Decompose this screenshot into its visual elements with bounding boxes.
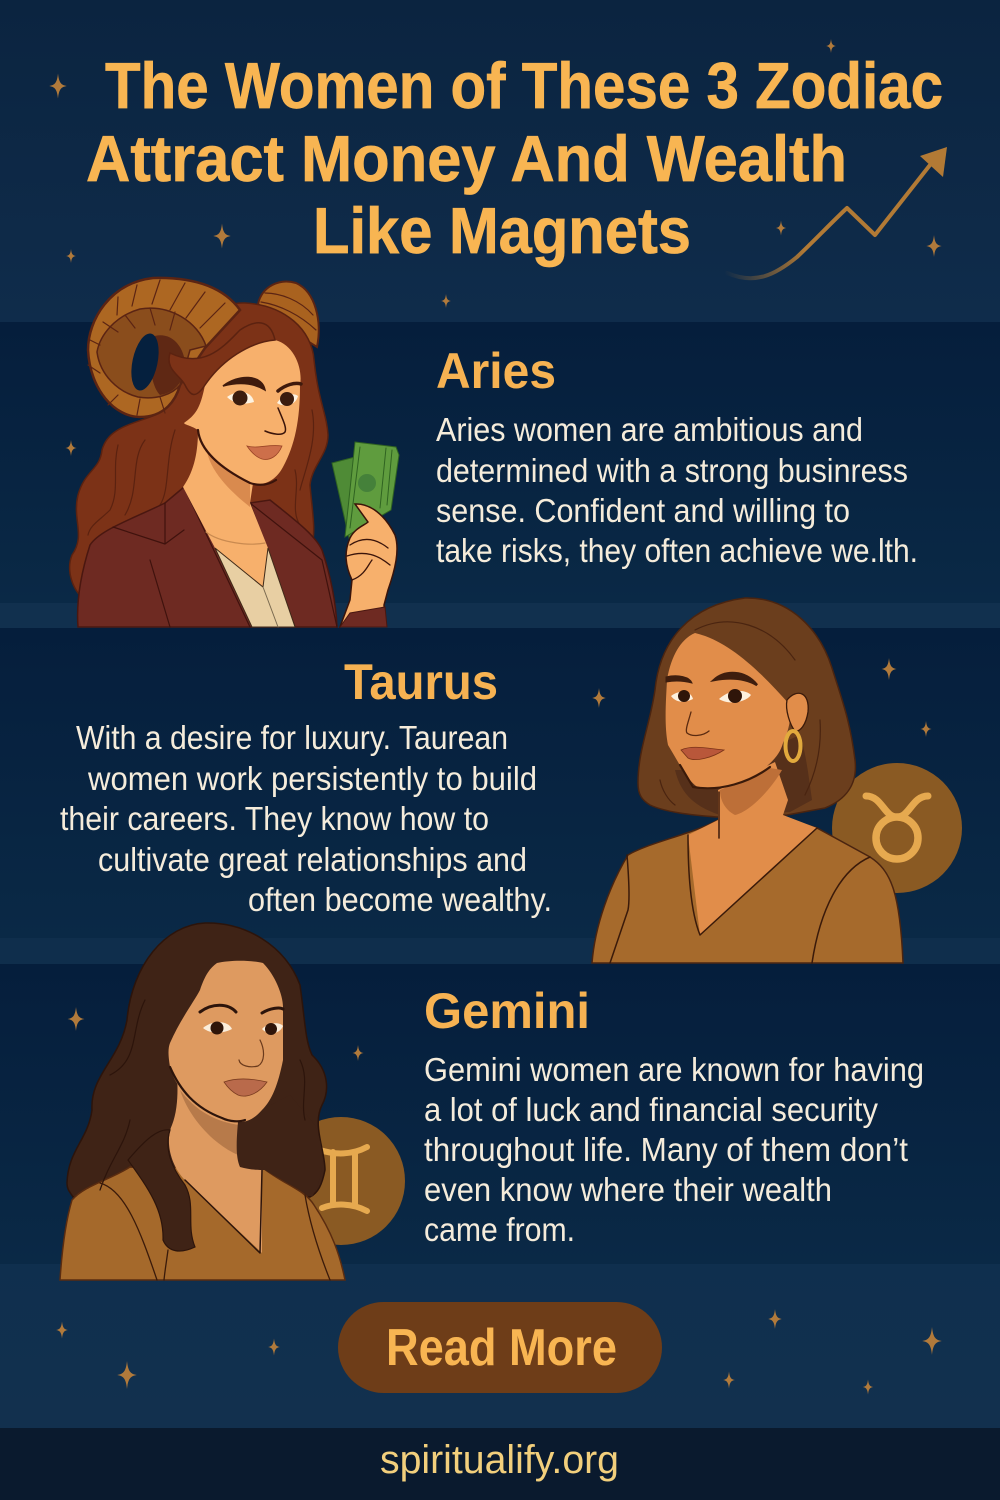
- hand and cuff: [340, 504, 397, 627]
- right horn: [258, 282, 319, 347]
- illustration: Aries woman with ram horns and money: [70, 278, 399, 627]
- panel: Gemini text: throughout life. Many of them don’t: [424, 1131, 908, 1168]
- panel: Gemini text: Gemini: [424, 983, 590, 1039]
- face: [168, 961, 283, 1122]
- panel: Taurus text: cultivate great relationships and: [98, 841, 527, 878]
- button: Read More: [338, 1302, 662, 1393]
- neck and chest: [688, 762, 817, 935]
- footer: website: [0, 1428, 1000, 1500]
- panel: Taurus text: women work persistently to build: [87, 760, 537, 797]
- eyes: [227, 392, 254, 404]
- footer: website: spiritualify.org: [380, 1438, 619, 1482]
- hair: [70, 303, 328, 600]
- eyebrows: [200, 1005, 283, 1013]
- panel: Aries text: take risks, they often achieve we.lth.: [436, 532, 918, 569]
- face: [666, 633, 790, 788]
- lips: [681, 747, 724, 760]
- panel: Gemini text: came from.: [424, 1211, 575, 1248]
- money bills: [332, 457, 360, 538]
- eyes: [671, 692, 693, 702]
- ear: [787, 693, 808, 731]
- title: Like Magnets: [313, 194, 691, 267]
- panel: Aries text: Aries women are ambitious and: [436, 411, 863, 448]
- panel: Taurus text: often become wealthy.: [248, 881, 552, 918]
- panel: Aries text: determined with a strong businress: [436, 452, 908, 489]
- hair: [638, 598, 855, 817]
- nose: [265, 408, 286, 434]
- eyebrows: [223, 377, 265, 390]
- horn opening: [127, 331, 163, 393]
- arrow: rising wealth trend: [727, 147, 947, 278]
- neck and chest skin: [183, 430, 268, 587]
- front hair sweep: [169, 323, 275, 394]
- Taurus badge: [832, 763, 962, 893]
- panel: Aries text: sense. Confident and willing to: [436, 492, 850, 529]
- panel: Taurus text: With a desire for luxury. Taurean: [76, 719, 508, 756]
- illustration: Taurus woman with zodiac badge: [592, 598, 962, 963]
- panel: Taurus text: [60, 654, 552, 918]
- button: Read More: Read More: [386, 1319, 617, 1377]
- eyes: [203, 1022, 232, 1033]
- earring: [786, 731, 800, 761]
- body: [60, 1167, 345, 1280]
- hair seen through horn: [149, 335, 185, 395]
- panel: Taurus text: their careers. They know how to: [60, 800, 489, 837]
- body: [592, 818, 903, 963]
- panel: Aries text: [436, 343, 918, 569]
- panel: Aries text: Aries: [436, 343, 556, 399]
- nose: [686, 712, 709, 735]
- nose: [239, 1040, 264, 1067]
- eyebrows: [666, 676, 692, 683]
- panel: Gemini text: a lot of luck and financial security: [424, 1091, 878, 1128]
- jacket: [78, 487, 337, 627]
- front hair strand: [128, 1130, 195, 1251]
- Gemini badge: [277, 1117, 405, 1245]
- panel: Gemini text: Gemini women are known for having: [424, 1051, 924, 1088]
- hair: [67, 923, 327, 1197]
- panel: Taurus text: Taurus: [344, 654, 498, 710]
- lips: [247, 446, 282, 459]
- title: Attract Money And Wealth: [86, 122, 847, 195]
- neck and chest: [169, 1075, 262, 1253]
- big spiral horn: [88, 278, 240, 417]
- lips: [224, 1079, 267, 1096]
- panel: Gemini text: even know where their wealth: [424, 1171, 832, 1208]
- panel: Gemini text: [424, 983, 924, 1248]
- face: [184, 340, 301, 484]
- blouse: [215, 548, 295, 627]
- illustration: Gemini woman with zodiac badge: [60, 923, 405, 1280]
- title: [86, 49, 943, 267]
